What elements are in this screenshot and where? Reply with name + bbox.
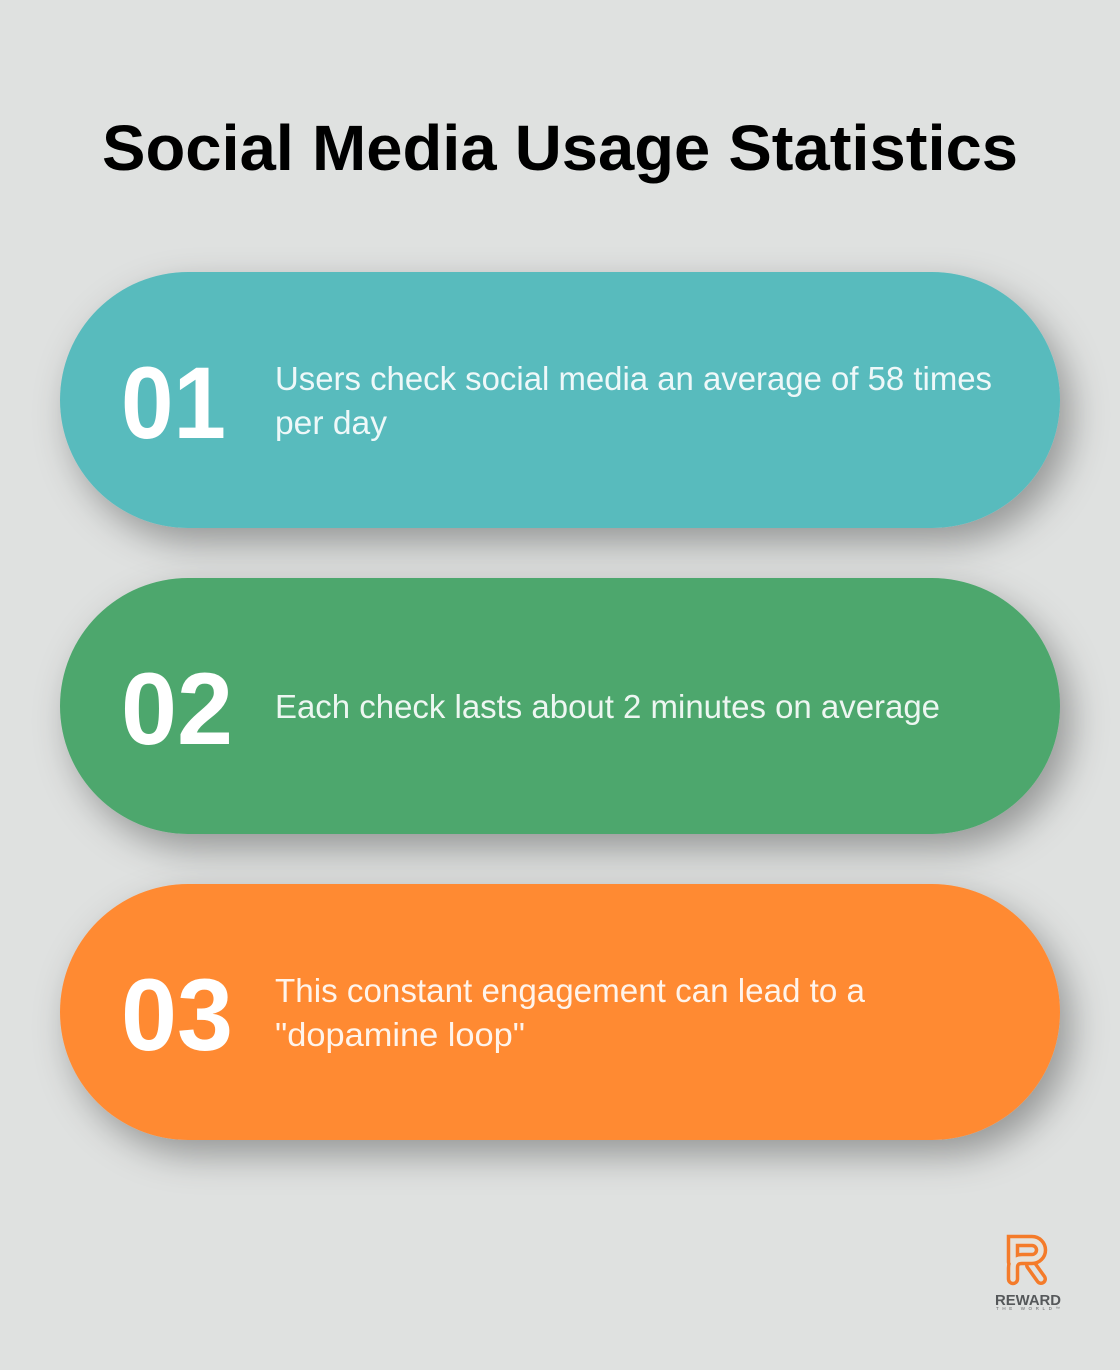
text: statistic 01: per day [275,404,388,441]
number 02: 02 [121,652,233,766]
title: Social Media Usage Statistics [102,112,1018,184]
text: statistic 02: Each check lasts about 2 minutes on average [275,688,940,725]
text: statistic 01: Users check social media an average of 58 times [275,360,992,397]
number 01: 01 [121,346,226,460]
tagline: THE WORLD™ [996,1306,1060,1311]
pill background: orange [60,884,1060,1140]
panel: statistic 02 [60,578,1060,834]
panel: statistic 01 [60,272,1060,528]
text: statistic 03: "dopamine loop" [275,1016,525,1053]
wordmark: REWARD [995,1293,1061,1309]
pill background: green [60,578,1060,834]
pill background: teal [60,272,1060,528]
panel: statistic 03 [60,884,1060,1140]
logo: Reward the World [995,1241,1061,1311]
icon: R mark [1013,1241,1041,1279]
number 03: 03 [121,958,233,1072]
text: statistic 03: This constant engagement can lead to a [275,972,866,1009]
